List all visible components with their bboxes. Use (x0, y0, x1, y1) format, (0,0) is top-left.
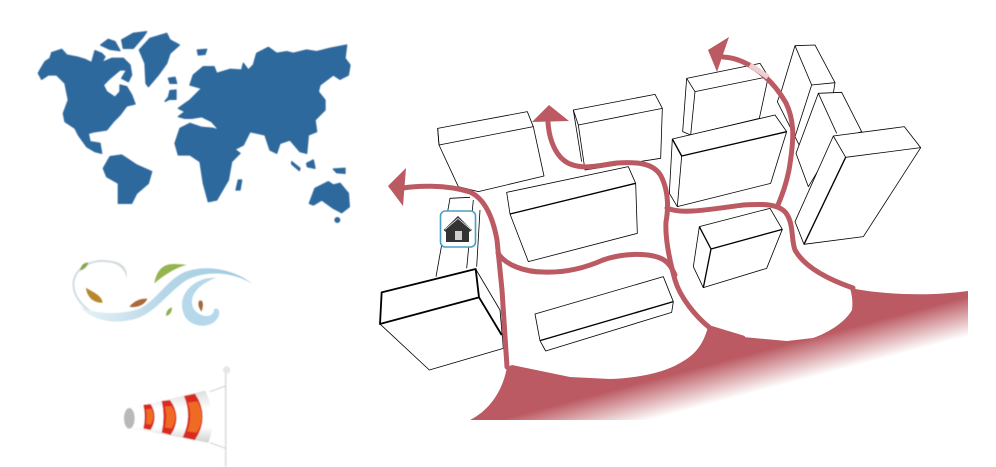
Greenland and Arctic islands (101, 32, 207, 101)
red stripes (143, 394, 203, 440)
flow arrow: right (708, 37, 793, 205)
icon: wind swirl with leaves (73, 261, 253, 326)
sock body (130, 391, 213, 443)
Southeast Asia and Madagascar (236, 160, 345, 190)
Eurasia (178, 45, 350, 153)
building: right tower (795, 127, 921, 244)
swirl outline (73, 261, 113, 321)
wave curl (182, 277, 219, 326)
orange stripe centres (146, 401, 202, 433)
red ground flow area (470, 288, 968, 420)
world map (38, 32, 350, 222)
building: back right (683, 63, 768, 135)
pole (223, 370, 228, 467)
North America (38, 49, 135, 153)
wave band (80, 268, 253, 322)
icon: windsock on pole (124, 366, 230, 467)
building: back left (438, 112, 544, 192)
leaves (80, 262, 203, 316)
flow branch: street (498, 253, 675, 275)
sock mouth (124, 408, 135, 429)
house door (455, 231, 462, 240)
building: tall mid (796, 92, 862, 187)
building: tall rear (777, 45, 835, 147)
building: back middle (573, 94, 662, 170)
building: long low block (535, 277, 673, 351)
building: large mid (669, 115, 787, 207)
South America (103, 155, 152, 203)
house roof and walls (444, 216, 472, 242)
building: front left (380, 269, 503, 370)
flow branch: right street (667, 204, 853, 288)
flow arrow: left (388, 168, 507, 367)
building: behind house (436, 197, 480, 277)
flow arrow: middle (532, 105, 743, 338)
Africa (175, 123, 240, 202)
building: small front (693, 208, 782, 288)
buildings: right block (669, 45, 921, 288)
buildings: left and centre block (380, 94, 673, 370)
top arc (110, 261, 127, 278)
wires (210, 386, 226, 448)
icon: house marker (440, 211, 476, 247)
roof highlight (445, 218, 471, 230)
building: centre (507, 167, 637, 262)
Australia (309, 182, 349, 222)
